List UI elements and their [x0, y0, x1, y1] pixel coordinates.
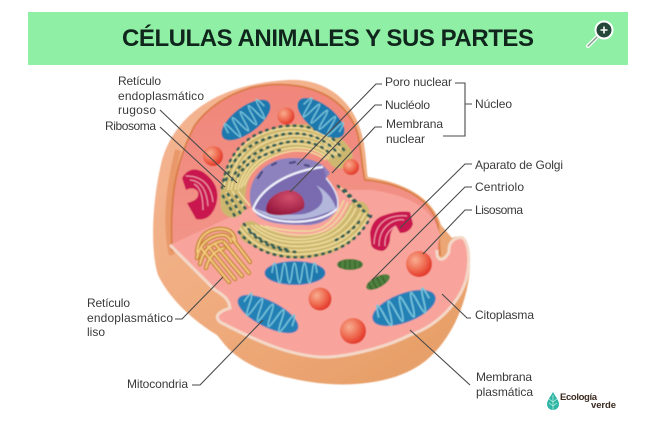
label: ribosoma: Ribosoma [105, 119, 156, 133]
leader lines [160, 83, 472, 385]
label: retículo endoplasmático liso [87, 296, 173, 339]
rough endoplasmic reticulum, lower [239, 186, 371, 257]
label: retículo endoplasmático rugoso: Retículo [118, 74, 161, 88]
nucleolus [266, 190, 304, 215]
label: aparato de golgi: Aparato de Golgi [475, 158, 563, 172]
golgi apparatus, left [182, 170, 217, 219]
label: membrana nuclear [386, 117, 443, 146]
label: nucléolo: Nucléolo [385, 98, 430, 112]
label: membrana nuclear: nuclear [386, 132, 425, 146]
plasma membrane rim [170, 238, 469, 357]
cell outer body [153, 80, 470, 384]
label: citoplasma: Citoplasma [475, 308, 534, 322]
mitochondrion 3 [265, 262, 325, 284]
title: CÉLULAS ANIMALES Y SUS PARTES [122, 24, 534, 52]
logo: ecología verde: verde [591, 400, 616, 411]
label: mitocondria: Mitocondria [127, 377, 188, 391]
logo: ecología verde: Ecología [560, 392, 598, 403]
label: membrana plasmática: Membrana [476, 370, 532, 384]
cell back wall [172, 84, 440, 255]
label: membrana nuclear: Membrana [386, 117, 443, 131]
diagram: animal cell [153, 80, 470, 384]
label: retículo endoplasmático rugoso: rugoso [118, 103, 156, 117]
label: retículo endoplasmático rugoso: endoplasmático [118, 89, 204, 103]
label: retículo endoplasmático liso: Retículo [87, 296, 130, 310]
rough endoplasmic reticulum, upper [222, 126, 344, 218]
mitochondrion 5 [368, 283, 440, 333]
mitochondrion 1 [215, 92, 277, 148]
label: retículo endoplasmático liso: liso [87, 325, 105, 339]
cytoplasm floor [170, 190, 469, 357]
centrioles [337, 259, 392, 293]
logo: ecología verde [547, 392, 616, 411]
lysosomes and spheres [203, 108, 432, 344]
smooth endoplasmic reticulum [197, 229, 250, 282]
label: centriolo: Centriolo [475, 180, 524, 194]
cell wall shading [168, 150, 178, 255]
label: lisosoma: Lisosoma [475, 203, 523, 217]
golgi apparatus, right [370, 212, 413, 251]
title banner [28, 12, 628, 65]
label: poro nuclear: Poro nuclear [385, 75, 452, 89]
icon: leaf drop [547, 392, 559, 410]
label: membrana plasmática: plasmática [476, 385, 533, 399]
label: retículo endoplasmático liso: endoplasmático [87, 311, 173, 325]
label: membrana plasmática [476, 370, 533, 399]
icon: magnifying glass [588, 22, 612, 46]
label: retículo endoplasmático rugoso [118, 74, 204, 117]
mitochondrion 4 [233, 288, 303, 340]
nucleus [250, 158, 338, 225]
mitochondrion 2 [291, 91, 351, 145]
label: núcleo: Núcleo [475, 97, 512, 111]
